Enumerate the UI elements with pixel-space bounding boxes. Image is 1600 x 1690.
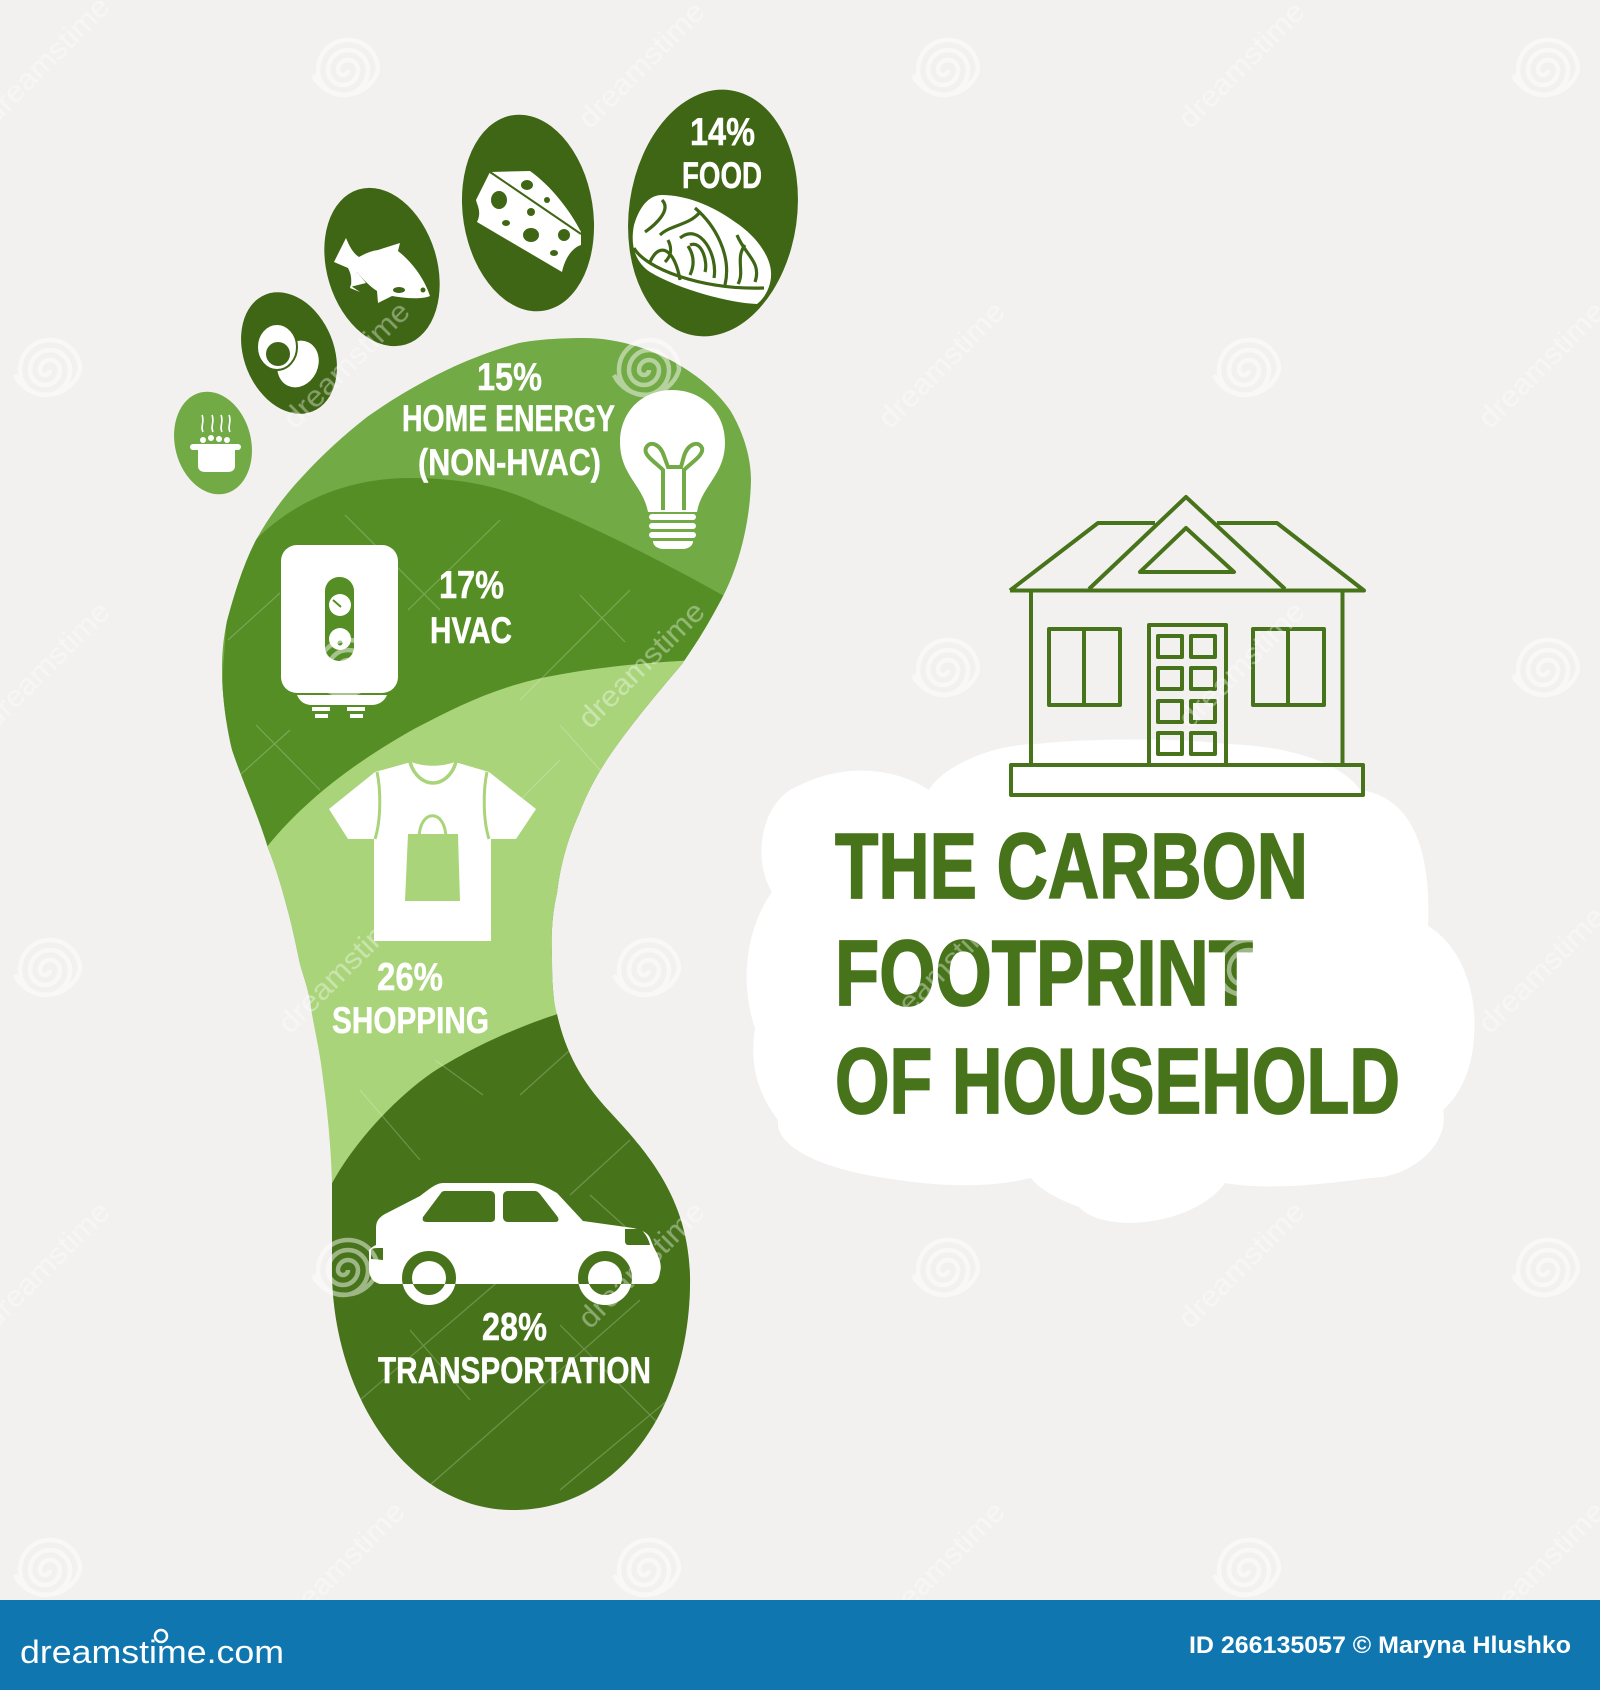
label: 17% hvac: 17% — [439, 564, 504, 607]
icon: fish — [334, 238, 430, 303]
label: 17% hvac — [430, 564, 512, 651]
banner credit: ID 266135057 © Maryna Hlushko — [1189, 1632, 1571, 1659]
band: transportation — [332, 1014, 690, 1510]
label: 15% home energy: HOME ENERGY — [402, 398, 615, 439]
label: 17% hvac: HVAC — [430, 610, 512, 651]
label: 26% shopping: 26% — [377, 956, 443, 999]
toe: big toe, meat — [613, 79, 813, 347]
title: THE CARBON — [835, 814, 1308, 918]
title cloud — [747, 740, 1475, 1223]
label: 26% shopping — [332, 956, 489, 1041]
watermark text: dreamstime — [572, 595, 712, 735]
banner logo spiral — [155, 1630, 167, 1642]
watermark text: dreamstime — [1172, 0, 1312, 135]
watermark text: dreamstime — [872, 900, 1012, 1040]
icon: t-shirt with shopping bag — [329, 762, 536, 941]
icon: cheese — [476, 171, 581, 272]
label: 15% home energy — [402, 356, 615, 483]
banner logo text: dreamstime.com — [20, 1634, 284, 1670]
icon: cooking pot — [190, 415, 241, 472]
icon: light bulb — [620, 390, 725, 549]
title: OF HOUSEHOLD — [835, 1029, 1400, 1133]
band: home energy — [222, 338, 751, 720]
icon: water heater — [281, 545, 398, 718]
label: 14% food: FOOD — [682, 155, 762, 196]
toe: little toe, pot — [164, 383, 262, 503]
watermark text: dreamstime — [872, 1495, 1012, 1635]
title — [835, 814, 1400, 1133]
footprint sole with four colour bands — [222, 338, 751, 1510]
icon: car — [369, 1183, 661, 1305]
watermark text: dreamstime — [1172, 595, 1312, 735]
label: 14% food — [682, 111, 762, 196]
watermark text: dreamstime — [572, 1195, 712, 1335]
icon: house outline — [1010, 497, 1364, 795]
watermark text: dreamstime — [272, 900, 412, 1040]
title: FOOTPRINT — [835, 921, 1253, 1025]
watermark hairlines — [228, 515, 680, 1490]
icon: steak — [633, 195, 771, 304]
label: 28% transportation: 28% — [482, 1306, 547, 1349]
watermark text: dreamstime — [572, 0, 712, 135]
watermark text: dreamstime — [872, 295, 1012, 435]
label: 15% home energy: 15% — [477, 356, 542, 399]
footer banner — [0, 1600, 1600, 1690]
watermark text: dreamstime — [1172, 1195, 1312, 1335]
toe: second, cheese — [448, 105, 608, 321]
watermark text: dreamstime — [272, 1495, 412, 1635]
label: 15% home energy: (NON-HVAC) — [418, 442, 601, 483]
label: 28% transportation: TRANSPORTATION — [378, 1350, 651, 1391]
band: hvac — [222, 478, 724, 1000]
label: 28% transportation — [378, 1306, 651, 1391]
toe: fourth, egg — [224, 278, 354, 428]
band: shopping — [268, 660, 690, 1300]
toe: third, fish — [306, 173, 458, 361]
label: 26% shopping: SHOPPING — [332, 1000, 489, 1041]
watermark text: dreamstime — [277, 295, 417, 435]
icon: boiled egg — [257, 324, 326, 394]
label: 14% food: 14% — [690, 111, 755, 154]
